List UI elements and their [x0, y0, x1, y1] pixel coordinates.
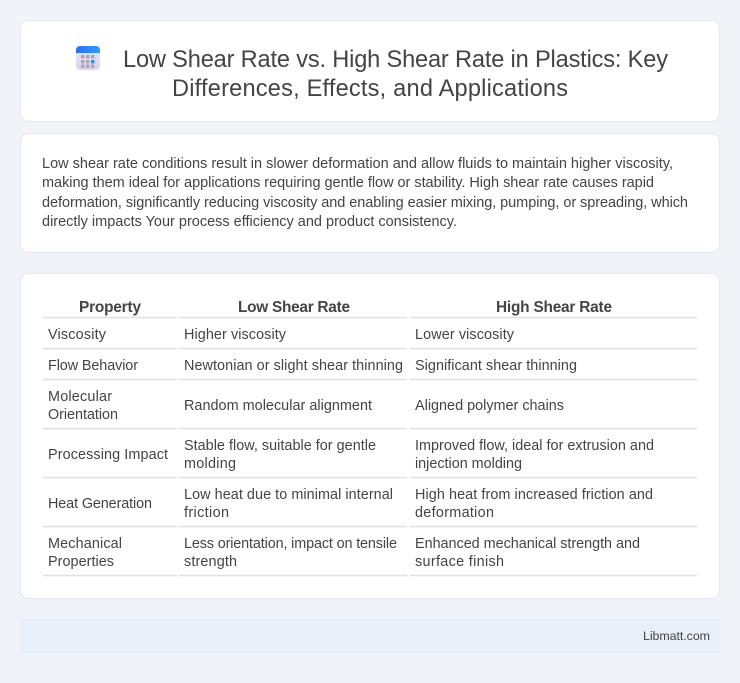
footer bar	[20, 619, 720, 653]
summary text: deformation, significantly reducing viscosity and enabling easier mixing, pumping, or spreading, which	[42, 195, 688, 211]
row: viscosity: Lower viscosity	[415, 327, 515, 343]
row: viscosity: Viscosity	[48, 327, 107, 343]
row: heat generation	[48, 487, 653, 521]
row: molecular orientation	[48, 389, 564, 423]
row: viscosity	[48, 327, 515, 343]
row: processing impact: Stable flow, suitable for gentle	[184, 438, 376, 454]
title	[123, 47, 668, 102]
row: molecular orientation: Aligned polymer chains	[415, 398, 564, 414]
row: mechanical properties: Less orientation, impact on tensile	[184, 536, 397, 552]
row: processing impact: molding	[184, 456, 236, 472]
row: heat generation: Heat Generation	[48, 496, 152, 512]
table header: Property	[79, 299, 141, 316]
title: Low Shear Rate vs. High Shear Rate in Plastics: Key	[123, 47, 668, 73]
row: flow behavior: Newtonian or slight shear thinning	[184, 358, 403, 374]
row: heat generation: friction	[184, 505, 229, 521]
row: processing impact: Improved flow, ideal for extrusion and	[415, 438, 654, 454]
row: processing impact	[48, 438, 654, 472]
summary text: Low shear rate conditions result in slower deformation and allow fluids to maintain higher viscosity,	[42, 156, 673, 172]
title panel	[20, 20, 720, 122]
row: flow behavior: Significant shear thinning	[415, 358, 577, 374]
row: flow behavior	[48, 358, 577, 374]
row: molecular orientation: Orientation	[48, 407, 118, 423]
icon: calendar	[76, 46, 100, 70]
table header	[79, 299, 612, 316]
row: molecular orientation: Random molecular alignment	[184, 398, 372, 414]
row: flow behavior: Flow Behavior	[48, 358, 138, 374]
row: viscosity: Higher viscosity	[184, 327, 287, 343]
footer credit: Libmatt.com	[643, 629, 710, 643]
table header: Low Shear Rate	[238, 299, 350, 316]
title: Differences, Effects, and Applications	[172, 76, 568, 102]
summary text: making them ideal for applications requiring gentle flow or stability. High shear rate causes rapid	[42, 175, 654, 191]
row: mechanical properties	[48, 536, 640, 570]
row: molecular orientation: Molecular	[48, 389, 112, 405]
summary panel	[20, 134, 720, 252]
row: mechanical properties: Mechanical	[48, 536, 122, 552]
row: processing impact: injection molding	[415, 456, 522, 472]
comparison table panel	[20, 274, 720, 598]
row: heat generation: deformation	[415, 505, 494, 521]
title card	[20, 20, 720, 122]
summary text: directly impacts Your process efficiency and product consistency.	[42, 214, 457, 230]
table header: High Shear Rate	[496, 299, 612, 316]
table card	[20, 274, 720, 598]
summary text	[42, 156, 688, 230]
summary card	[20, 134, 720, 252]
row: mechanical properties: Enhanced mechanical strength and	[415, 536, 640, 552]
row: processing impact: Processing Impact	[48, 447, 168, 463]
footer	[20, 619, 720, 653]
row: heat generation: High heat from increased friction and	[415, 487, 653, 503]
row: mechanical properties: Properties	[48, 554, 114, 570]
row: mechanical properties: strength	[184, 554, 237, 570]
row: heat generation: Low heat due to minimal internal	[184, 487, 393, 503]
row: mechanical properties: surface finish	[415, 554, 504, 570]
